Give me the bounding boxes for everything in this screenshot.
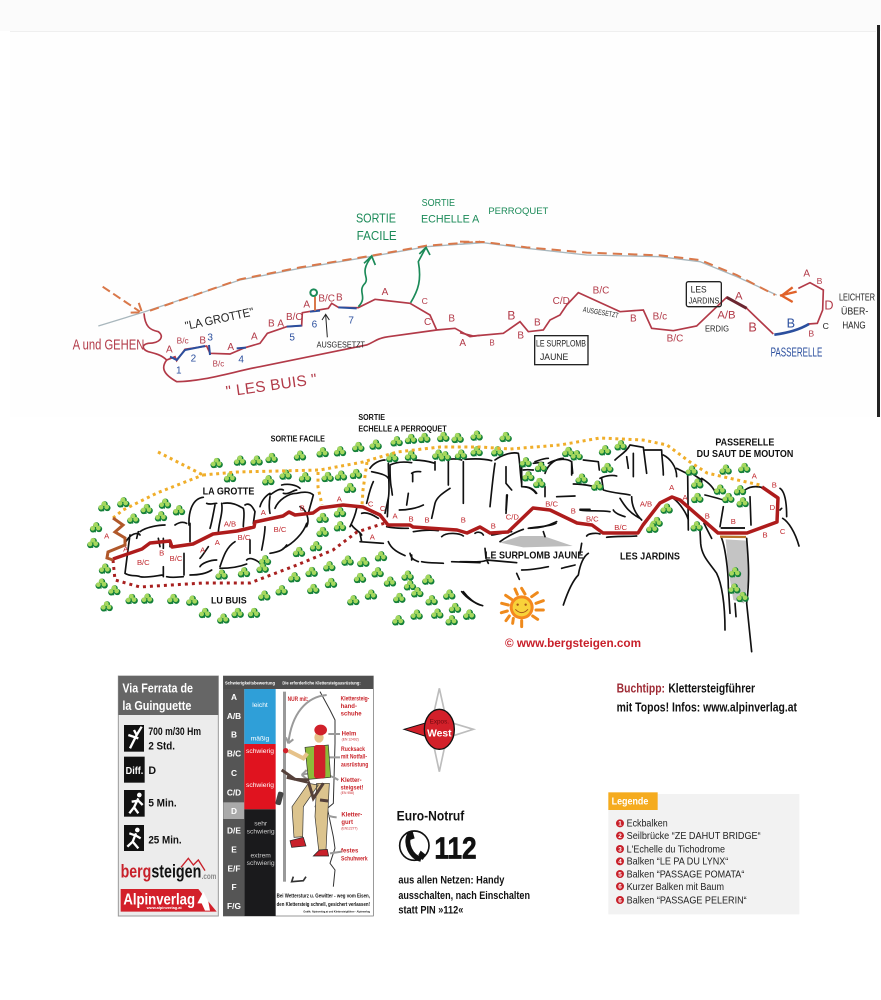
grade labels left: A xyxy=(104,531,110,540)
overhang label: HANG xyxy=(842,320,866,331)
overhang label: ÜBER- xyxy=(841,305,868,317)
grade labels right: B xyxy=(571,506,576,515)
descent time xyxy=(124,825,182,851)
grade scale: B/C xyxy=(227,749,241,759)
grade scale: A xyxy=(231,692,237,702)
grade labels left: C xyxy=(368,500,374,509)
gear labels: Schuhwerk xyxy=(341,856,368,862)
grade and number marks left: A xyxy=(277,319,284,330)
grade labels left: B xyxy=(461,515,466,524)
grade marks right: B xyxy=(534,318,541,329)
map place names right: PASSERELLE xyxy=(715,438,775,449)
grade labels right: A xyxy=(682,493,688,502)
alpinverlag logo: www.alpinverlag.at xyxy=(146,906,182,910)
grade scale: D xyxy=(231,806,237,816)
la grotte label: "LA GROTTE" xyxy=(184,305,255,333)
gear labels: Helm xyxy=(342,732,356,738)
book tip: Buchtipp: xyxy=(617,681,665,696)
passerelle bridge bars xyxy=(720,528,746,537)
grade labels left: B/C xyxy=(238,533,251,542)
map place names right xyxy=(485,438,793,563)
icon: exposure compass xyxy=(404,688,473,772)
map place names right: DU SAUT DE MOUTON xyxy=(697,449,793,460)
card header xyxy=(118,676,218,715)
head and helmet xyxy=(314,725,327,743)
grade labels right: A xyxy=(669,483,675,492)
glove xyxy=(283,748,288,753)
icon: sun xyxy=(501,588,543,627)
map place names left: LU BUIS xyxy=(211,595,247,605)
difficulty info xyxy=(124,757,156,783)
trees right group xyxy=(463,432,750,620)
blue passerelle xyxy=(774,324,809,335)
grade and number marks left: A xyxy=(382,287,389,298)
grade labels left: A xyxy=(261,508,267,517)
sortie echelle label xyxy=(421,198,480,226)
grade labels right: B xyxy=(491,521,496,530)
boots xyxy=(290,837,329,856)
grade labels left: A xyxy=(200,545,206,554)
cable pole xyxy=(283,692,286,882)
red route les buis branch xyxy=(164,328,480,382)
grade labels left: A xyxy=(123,545,129,554)
chart header: Die erforderliche Klettersteigausrüstung: xyxy=(282,680,361,685)
grade marks right: B/C xyxy=(667,334,683,345)
perroquet label: PERROQUET xyxy=(488,206,549,216)
book tip: Klettersteigführer xyxy=(668,681,755,696)
blue beam segments xyxy=(170,307,357,360)
map place names left: LA GROTTE xyxy=(203,487,255,498)
grade and number marks left: 3 xyxy=(207,333,213,344)
grade and number marks left: 6 xyxy=(312,320,318,331)
grade scale: F xyxy=(231,882,237,892)
legend entries: Seilbrücke “ZE DAHUT BRIDGE“ xyxy=(627,831,761,842)
grade labels right: B xyxy=(762,530,768,539)
grade and number marks left: B/C xyxy=(286,312,303,323)
grade labels left: B xyxy=(424,516,430,525)
grade labels left: A xyxy=(370,532,376,541)
legend entries: L'Echelle du Tichodrome xyxy=(627,845,725,856)
grade labels left: B/C xyxy=(137,558,150,567)
grade labels left: C xyxy=(380,504,386,513)
red route upper branch xyxy=(143,299,437,361)
torso and arm xyxy=(305,745,331,779)
legend entries: Eckbalken xyxy=(627,819,668,830)
jardins box xyxy=(686,282,721,307)
grade labels left xyxy=(104,495,466,567)
emergency call block: aus allen Netzen: Handy xyxy=(398,874,505,886)
legend tab xyxy=(608,792,658,810)
map place names left: SORTIE FACILE xyxy=(271,435,326,444)
grade and number marks left: A xyxy=(227,342,234,353)
grade labels right: D xyxy=(770,503,776,512)
grade and number marks left: B/c xyxy=(213,360,224,369)
rock edge xyxy=(320,692,335,887)
gear labels: steigset! xyxy=(341,785,363,791)
difficulty colour bands: sehr xyxy=(254,821,268,828)
green exit facile xyxy=(358,256,375,307)
gear labels: Kletter- xyxy=(341,778,362,784)
red dotted les buis route xyxy=(113,523,385,587)
grade marks right: A/B xyxy=(717,309,736,321)
grade and number marks left: A xyxy=(166,345,173,356)
dark ascent segment xyxy=(727,297,747,308)
gear labels: schuhe xyxy=(341,712,362,718)
difficulty colour bands: schwierig xyxy=(246,748,274,755)
grade and number marks left: A xyxy=(303,299,310,310)
overhang label xyxy=(839,293,875,331)
grade and number marks left: B xyxy=(199,335,206,346)
ausgesetzt label: AUSGESETZT xyxy=(317,340,365,349)
grade marks right: B xyxy=(489,339,495,348)
trees left group xyxy=(87,430,483,625)
green exit echelle xyxy=(411,247,430,303)
difficulty colour bands: leicht xyxy=(252,702,268,709)
icon: exposure compass: Expos. xyxy=(430,718,449,725)
difficulty info: Diff. xyxy=(126,766,144,777)
sortie facile label: FACILE xyxy=(357,229,397,243)
grade and number marks left: 4 xyxy=(238,355,244,366)
weather warning text: Bei Wettersturz u. Gewitter - weg vom Eisen, xyxy=(277,894,370,900)
ascent info: 700 m/30 Hm xyxy=(148,726,201,738)
dashed approach line right xyxy=(460,242,775,295)
gear labels: ausrüstung xyxy=(341,763,369,769)
grade marks right: B xyxy=(517,330,524,341)
emergency call block: Euro-Notruf xyxy=(397,808,465,823)
grade labels right: B xyxy=(772,480,777,489)
ascent info: 2 Std. xyxy=(148,740,175,752)
grade marks right: B xyxy=(748,321,757,335)
legend entries: 3 xyxy=(618,846,622,853)
grade and number marks left: 5 xyxy=(289,333,295,344)
grade marks right: B xyxy=(507,308,515,322)
yellow dotted descent xyxy=(113,438,760,518)
grade and number marks left xyxy=(166,287,466,376)
map place names left: SORTIE xyxy=(358,413,386,422)
sketch right half xyxy=(460,206,875,365)
alpinverlag logo: Alpinverlag xyxy=(123,891,195,908)
grade labels right: A/B xyxy=(640,500,652,509)
gear labels: mit Notfall- xyxy=(341,755,367,761)
grade and number marks left: C xyxy=(424,317,431,328)
difficulty info: D xyxy=(148,765,156,777)
gray rock shading xyxy=(500,536,749,603)
emergency call block xyxy=(397,808,530,917)
black arrow xyxy=(322,314,329,337)
gear labels: (EN 958) xyxy=(341,791,354,795)
legend entries: Kurzer Balken mit Baum xyxy=(627,882,724,893)
grade scale xyxy=(223,689,244,916)
grade marks right: B xyxy=(817,276,823,286)
harness and sling xyxy=(282,770,328,801)
difficulty colour bands: schwierig xyxy=(247,828,275,835)
grade scale: E/F xyxy=(228,864,240,874)
grade labels left: B xyxy=(300,504,305,513)
ascent info xyxy=(124,725,201,752)
tree mark xyxy=(312,297,318,311)
surplomb box xyxy=(535,336,588,365)
printed topo map xyxy=(87,413,799,652)
icon: phone xyxy=(400,831,429,860)
book tip xyxy=(617,681,798,715)
grade labels left: B xyxy=(408,515,414,524)
grade labels right: B/C xyxy=(586,515,599,524)
grade labels right: B xyxy=(705,511,710,520)
hand-drawn sketch topo xyxy=(73,198,875,401)
weather warning text: den Klettersteig schnell, gesichert verlassen! xyxy=(277,902,370,908)
grade and number marks left: A xyxy=(251,331,258,342)
red route right xyxy=(460,283,823,336)
grade marks right: B/c xyxy=(653,311,667,322)
legend entries: 6 xyxy=(618,897,622,904)
grade and number marks left: B xyxy=(448,314,455,325)
ridge line right xyxy=(460,243,777,295)
grade and number marks left: 2 xyxy=(191,354,197,365)
backpack xyxy=(314,745,325,778)
bergsteigen logo: steigen xyxy=(151,861,201,882)
grade labels right xyxy=(491,471,786,539)
grade marks right: D xyxy=(824,298,833,312)
labels left: A und GEHEN xyxy=(73,337,144,353)
approach arrow xyxy=(103,287,142,313)
surplomb box: LE SURPLOMB xyxy=(536,339,586,349)
alpinverlag logo xyxy=(121,889,217,912)
gear labels: Klettersteig- xyxy=(341,697,369,703)
grade scale: D/E xyxy=(227,825,241,835)
gear labels: NUR mit: xyxy=(288,697,308,703)
difficulty colour bands: schwierig xyxy=(247,860,275,867)
dashed approach line left xyxy=(150,242,480,311)
brown approach path xyxy=(107,518,125,560)
grade labels right: B/C xyxy=(545,500,559,509)
map place names right: LE SURPLOMB JAUNE xyxy=(485,550,584,561)
grade scale: B xyxy=(231,730,237,740)
card header: Via Ferrata de xyxy=(122,682,193,696)
emergency call block: ausschalten, nach Einschalten xyxy=(398,890,530,902)
red main route xyxy=(113,487,778,559)
grade labels left: A xyxy=(337,495,343,504)
jardins box: LES xyxy=(691,285,707,295)
hanging carabiner xyxy=(292,877,306,882)
sortie echelle label: ECHELLE A xyxy=(421,214,480,226)
gear labels: gurt xyxy=(341,820,353,826)
ridge line left xyxy=(98,243,480,326)
difficulty colour bands: mäßig xyxy=(251,735,270,742)
grade labels left: A xyxy=(392,511,398,520)
grade and number marks left: B/c xyxy=(177,335,189,345)
jardins box: JARDINS xyxy=(689,295,720,305)
tree crown xyxy=(310,289,317,296)
card header: la Guinguette xyxy=(122,699,191,713)
approach time xyxy=(124,790,177,817)
sortie facile label: SORTIE xyxy=(356,212,396,226)
bergsteigen logo: .com xyxy=(202,871,217,881)
grade marks right: B/C xyxy=(593,285,609,296)
approach time: 5 Min. xyxy=(148,798,177,810)
panel: legend xyxy=(608,792,799,914)
grade marks right: C xyxy=(823,321,829,331)
gear labels: Rucksack xyxy=(341,747,366,753)
les buis label: " LES BUIS " xyxy=(225,371,318,401)
weather warning text xyxy=(277,894,370,914)
grade and number marks left: 1 xyxy=(176,365,182,376)
grade labels left: B xyxy=(159,549,164,558)
grade marks right: A xyxy=(735,290,743,302)
rock outlines right xyxy=(460,445,799,652)
weather warning text: Grafik: Alpinverlag.at und Klettersteigführer - Alpinverlag xyxy=(303,910,370,914)
difficulty colour bands: extrem xyxy=(250,853,271,860)
grade labels left: A xyxy=(215,538,221,547)
grade scale: C xyxy=(231,768,237,778)
grade marks right xyxy=(489,269,833,348)
gear labels: Kletter- xyxy=(341,813,362,819)
legend entries: Balken “PASSAGE POMATA“ xyxy=(627,869,744,880)
gear arrows xyxy=(286,695,342,853)
grade scale: A/B xyxy=(227,711,241,721)
icon: climber with gear xyxy=(275,692,342,887)
legend entries: Balken “PASSAGE PELERIN“ xyxy=(627,895,747,906)
panel: route info card xyxy=(118,676,218,916)
grade marks right: B xyxy=(630,314,637,325)
emergency call block: 112 xyxy=(434,831,477,865)
grade and number marks left: B xyxy=(268,319,275,330)
grade scale: F/G xyxy=(227,901,241,911)
grade labels left: A/B xyxy=(224,520,236,529)
grade scale: E xyxy=(231,844,237,854)
grade labels left: B/C xyxy=(170,554,183,563)
difficulty colour bands xyxy=(244,689,276,916)
grade and number marks left: A xyxy=(459,338,466,349)
grade scale: C/D xyxy=(227,787,241,797)
grade labels right: B/C xyxy=(614,523,628,532)
gear labels: festes xyxy=(341,849,359,855)
legend entries: 1 xyxy=(618,821,622,828)
auscerere label: AUSGESETZT xyxy=(582,305,620,320)
rock outlines left xyxy=(125,460,480,605)
orange return arrow xyxy=(780,287,797,302)
surplomb box: JAUNE xyxy=(540,352,568,362)
carabiner xyxy=(275,791,284,806)
bergsteigen logo xyxy=(121,858,217,882)
legend entries: 6 xyxy=(618,884,622,891)
sketch paper background xyxy=(0,0,881,417)
chart header xyxy=(223,676,373,689)
copyright website: © www.bergsteigen.com xyxy=(505,636,641,650)
sketch left half xyxy=(73,198,480,401)
difficulty colour bands: schwierig xyxy=(246,782,274,789)
grade labels left: B/C xyxy=(274,525,287,534)
grade marks right: B xyxy=(808,329,814,339)
grade labels right: A xyxy=(752,471,758,480)
grade marks right: C/D xyxy=(553,296,570,307)
gear labels: hand- xyxy=(341,704,357,710)
chart header: Schwierigkeitsbewertung xyxy=(225,680,275,685)
gear labels: (EN12277) xyxy=(341,826,357,830)
legend entries xyxy=(616,819,761,906)
erdig label: ERDIG xyxy=(705,324,729,334)
gear labels: (EN 12492) xyxy=(342,737,359,741)
grade and number marks left: 7 xyxy=(348,315,354,326)
grade labels right: B xyxy=(731,517,736,526)
gear labels xyxy=(288,697,369,862)
icon: exposure compass: West xyxy=(427,729,452,740)
grade and number marks left: B/C xyxy=(318,294,335,305)
book tip: mit Topos! Infos: www.alpinverlag.at xyxy=(617,700,798,715)
grade and number marks left: B xyxy=(336,293,343,304)
descent time: 25 Min. xyxy=(148,834,182,846)
grade marks right: A xyxy=(803,269,810,280)
map place names left xyxy=(203,413,447,605)
legend entries: 2 xyxy=(618,833,622,840)
grade and number marks left: C xyxy=(422,296,428,306)
grade labels right: C/D xyxy=(506,512,519,521)
legend entries: Balken “LE PA DU LYNX“ xyxy=(627,857,728,868)
map place names left: ECHELLE A PERROQUET xyxy=(358,424,447,433)
grade marks right: B xyxy=(787,316,795,330)
map place names right: LES JARDINS xyxy=(620,552,680,563)
panel: difficulty and gear chart xyxy=(223,676,373,916)
rock outlines center xyxy=(387,453,573,560)
legs xyxy=(292,783,329,850)
passerelle label: PASSERELLE xyxy=(771,346,822,360)
legend entries: 5 xyxy=(618,871,622,878)
bergsteigen logo: berg xyxy=(121,861,151,882)
sortie facile label xyxy=(356,212,397,243)
emergency call block: statt PIN »112« xyxy=(398,905,463,917)
grade labels right: C xyxy=(780,527,786,536)
legend tab: Legende xyxy=(612,796,649,807)
sortie echelle label: SORTIE xyxy=(422,198,455,209)
legend entries: 4 xyxy=(618,859,622,866)
